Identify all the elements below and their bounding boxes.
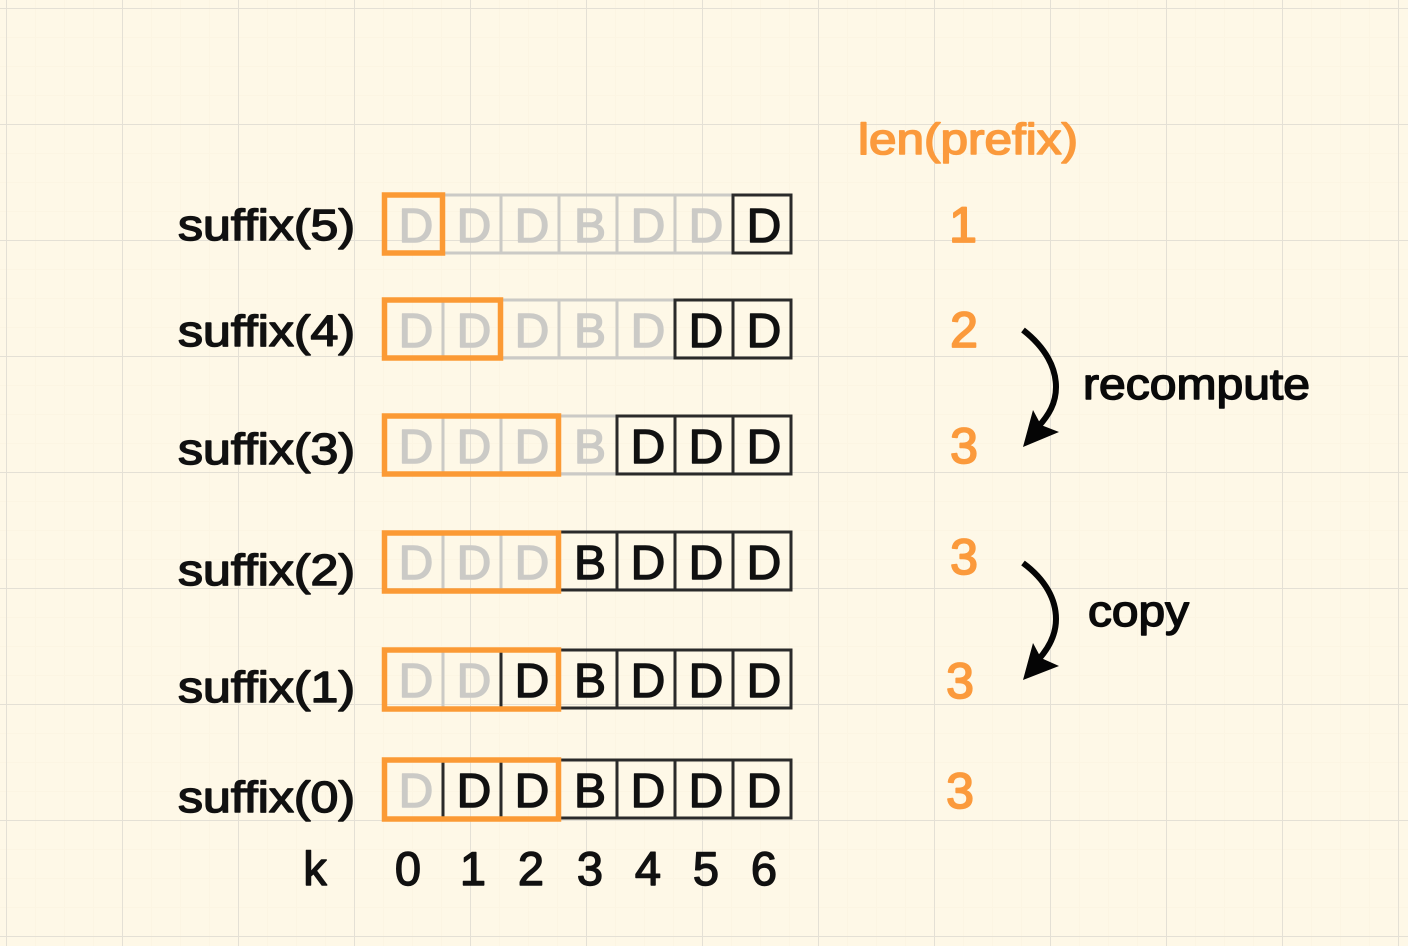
row: suffix(2): D	[457, 537, 491, 590]
row: suffix(2): B	[574, 537, 606, 590]
row: suffix(3): D	[747, 421, 781, 474]
row: suffix(4): D	[457, 305, 491, 358]
orange prefix box	[384, 650, 558, 709]
row: suffix(4): D	[399, 305, 433, 358]
len(prefix) values: 3	[950, 418, 978, 474]
index axis: k 0-6: 1	[460, 842, 486, 895]
label: suffix(4): suffix(4)	[178, 307, 355, 356]
row: suffix(4): D	[631, 305, 665, 358]
column heading: len(prefix): len(prefix)	[858, 115, 1078, 164]
row: suffix(5): D	[747, 200, 781, 253]
row: suffix(0): D	[689, 765, 723, 818]
row: suffix(5): D	[689, 200, 723, 253]
orange prefix box	[384, 300, 500, 358]
label: suffix(5): suffix(5)	[178, 201, 355, 250]
row: suffix(0): D	[399, 765, 433, 818]
row: suffix(1): D	[747, 655, 781, 708]
row: suffix(1): D	[689, 655, 723, 708]
row: suffix(1): D	[515, 655, 549, 708]
row: suffix(1): D	[399, 655, 433, 708]
row: suffix(4): D	[689, 305, 723, 358]
row: suffix(5): D	[399, 200, 433, 253]
label: suffix(2): suffix(2)	[178, 546, 355, 595]
len(prefix) values: 3	[946, 763, 974, 819]
row: suffix(0): D	[515, 765, 549, 818]
orange prefix box	[384, 416, 558, 474]
row: suffix(2)	[178, 532, 791, 595]
row: suffix(5): B	[574, 200, 606, 253]
row: suffix(2): D	[689, 537, 723, 590]
row: suffix(5): D	[457, 200, 491, 253]
index axis: k 0-6: 0	[395, 842, 421, 895]
index axis: k 0-6: 3	[577, 842, 603, 895]
row: suffix(4): B	[574, 305, 606, 358]
len(prefix) values: 3	[950, 529, 978, 585]
index axis: k 0-6: 5	[693, 842, 719, 895]
row: suffix(1): B	[574, 655, 606, 708]
orange prefix box	[384, 760, 558, 819]
label: copy: copy	[1088, 587, 1189, 636]
arrow: copy	[1023, 563, 1059, 680]
label: suffix(1): suffix(1)	[178, 663, 355, 712]
row: suffix(4): D	[747, 305, 781, 358]
index axis: k 0-6: 4	[635, 842, 661, 895]
row: suffix(2): D	[747, 537, 781, 590]
row: suffix(0): B	[574, 765, 606, 818]
row: suffix(1): D	[457, 655, 491, 708]
row: suffix(0): D	[631, 765, 665, 818]
label: suffix(0): suffix(0)	[178, 773, 355, 822]
row: suffix(0): D	[457, 765, 491, 818]
len(prefix) values	[946, 197, 978, 819]
orange prefix box	[384, 195, 442, 253]
row: suffix(3)	[178, 416, 791, 474]
row: suffix(4)	[178, 300, 791, 358]
row: suffix(0)	[178, 760, 791, 822]
row: suffix(1)	[178, 650, 791, 712]
row: suffix(2): D	[399, 537, 433, 590]
len(prefix) values: 1	[949, 197, 977, 253]
len(prefix) values: 3	[946, 653, 974, 709]
row: suffix(4): D	[515, 305, 549, 358]
row: suffix(3): B	[574, 421, 606, 474]
row: suffix(5)	[178, 195, 791, 253]
row: suffix(3): D	[689, 421, 723, 474]
row: suffix(3): D	[515, 421, 549, 474]
index axis: k 0-6: 2	[518, 842, 544, 895]
orange prefix box	[384, 533, 558, 591]
row: suffix(3): D	[457, 421, 491, 474]
row: suffix(2): D	[515, 537, 549, 590]
index axis: k 0-6	[303, 842, 777, 895]
label: suffix(3): suffix(3)	[178, 425, 355, 474]
label: recompute: recompute	[1083, 360, 1310, 409]
arrow: recompute	[1023, 330, 1059, 447]
row: suffix(5): D	[631, 200, 665, 253]
row: suffix(0): D	[747, 765, 781, 818]
row: suffix(1): D	[631, 655, 665, 708]
index axis: k 0-6: k	[303, 842, 327, 895]
row: suffix(3): D	[399, 421, 433, 474]
len(prefix) values: 2	[950, 302, 978, 358]
row: suffix(2): D	[631, 537, 665, 590]
row: suffix(3): D	[631, 421, 665, 474]
row: suffix(5): D	[515, 200, 549, 253]
index axis: k 0-6: 6	[751, 842, 777, 895]
